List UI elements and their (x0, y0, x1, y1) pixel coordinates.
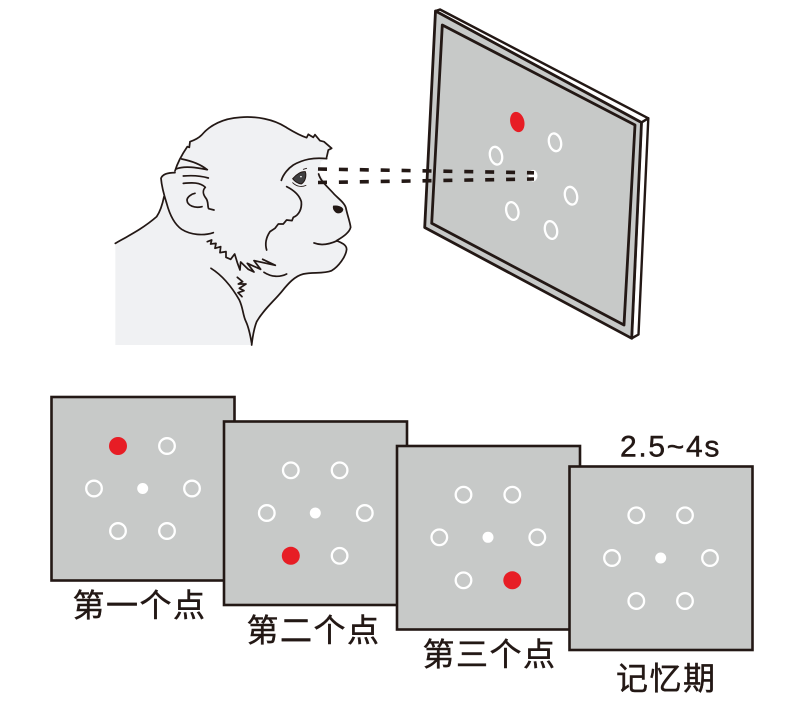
cheek fur (266, 187, 301, 250)
panel: first dot (52, 397, 234, 580)
rings (604, 508, 718, 609)
rings (86, 438, 200, 539)
monitor top edge (436, 10, 648, 122)
monitor stimuli (488, 110, 579, 240)
panel: third dot (397, 446, 580, 630)
red target on monitor (508, 110, 527, 134)
mouth line (314, 241, 337, 244)
ear (161, 173, 213, 235)
monitor frame (425, 11, 642, 338)
label: third dot: 第三个点 (422, 636, 557, 672)
label: memory period: 记忆期 (616, 660, 717, 696)
gaze dashed lines (318, 169, 534, 182)
red target (109, 437, 127, 455)
white fixation dot on monitor (528, 170, 538, 182)
neck fur tufts (207, 240, 275, 272)
monitor (425, 10, 648, 338)
fixation dot (655, 552, 666, 564)
label: first dot: 第一个点 (72, 588, 207, 624)
nostril (333, 206, 343, 213)
head creases by the ear (176, 159, 208, 178)
red target (282, 547, 300, 565)
face profile outline (252, 174, 351, 345)
fixation dot (137, 483, 148, 494)
fixation dot (482, 532, 494, 543)
monkey silhouette fill (115, 117, 351, 345)
monitor right edge (632, 118, 648, 338)
fixation dot (310, 508, 321, 518)
brow line (281, 158, 327, 180)
rings (432, 487, 545, 588)
rings (259, 462, 373, 564)
panel: memory period (570, 466, 752, 650)
throat line with tuft (211, 268, 252, 343)
inner ear (183, 183, 214, 210)
red target (503, 571, 521, 589)
illustration: monkey head in profile (115, 117, 351, 345)
panel: second dot (224, 422, 407, 605)
jaw crease (264, 272, 287, 276)
back, neck and crown outline (115, 117, 332, 243)
white rings on monitor (488, 132, 579, 240)
label: second dot: 第二个点 (246, 612, 381, 648)
monitor screen (432, 25, 635, 325)
label: duration: 2.5~4s (620, 430, 721, 464)
eye (293, 168, 307, 186)
